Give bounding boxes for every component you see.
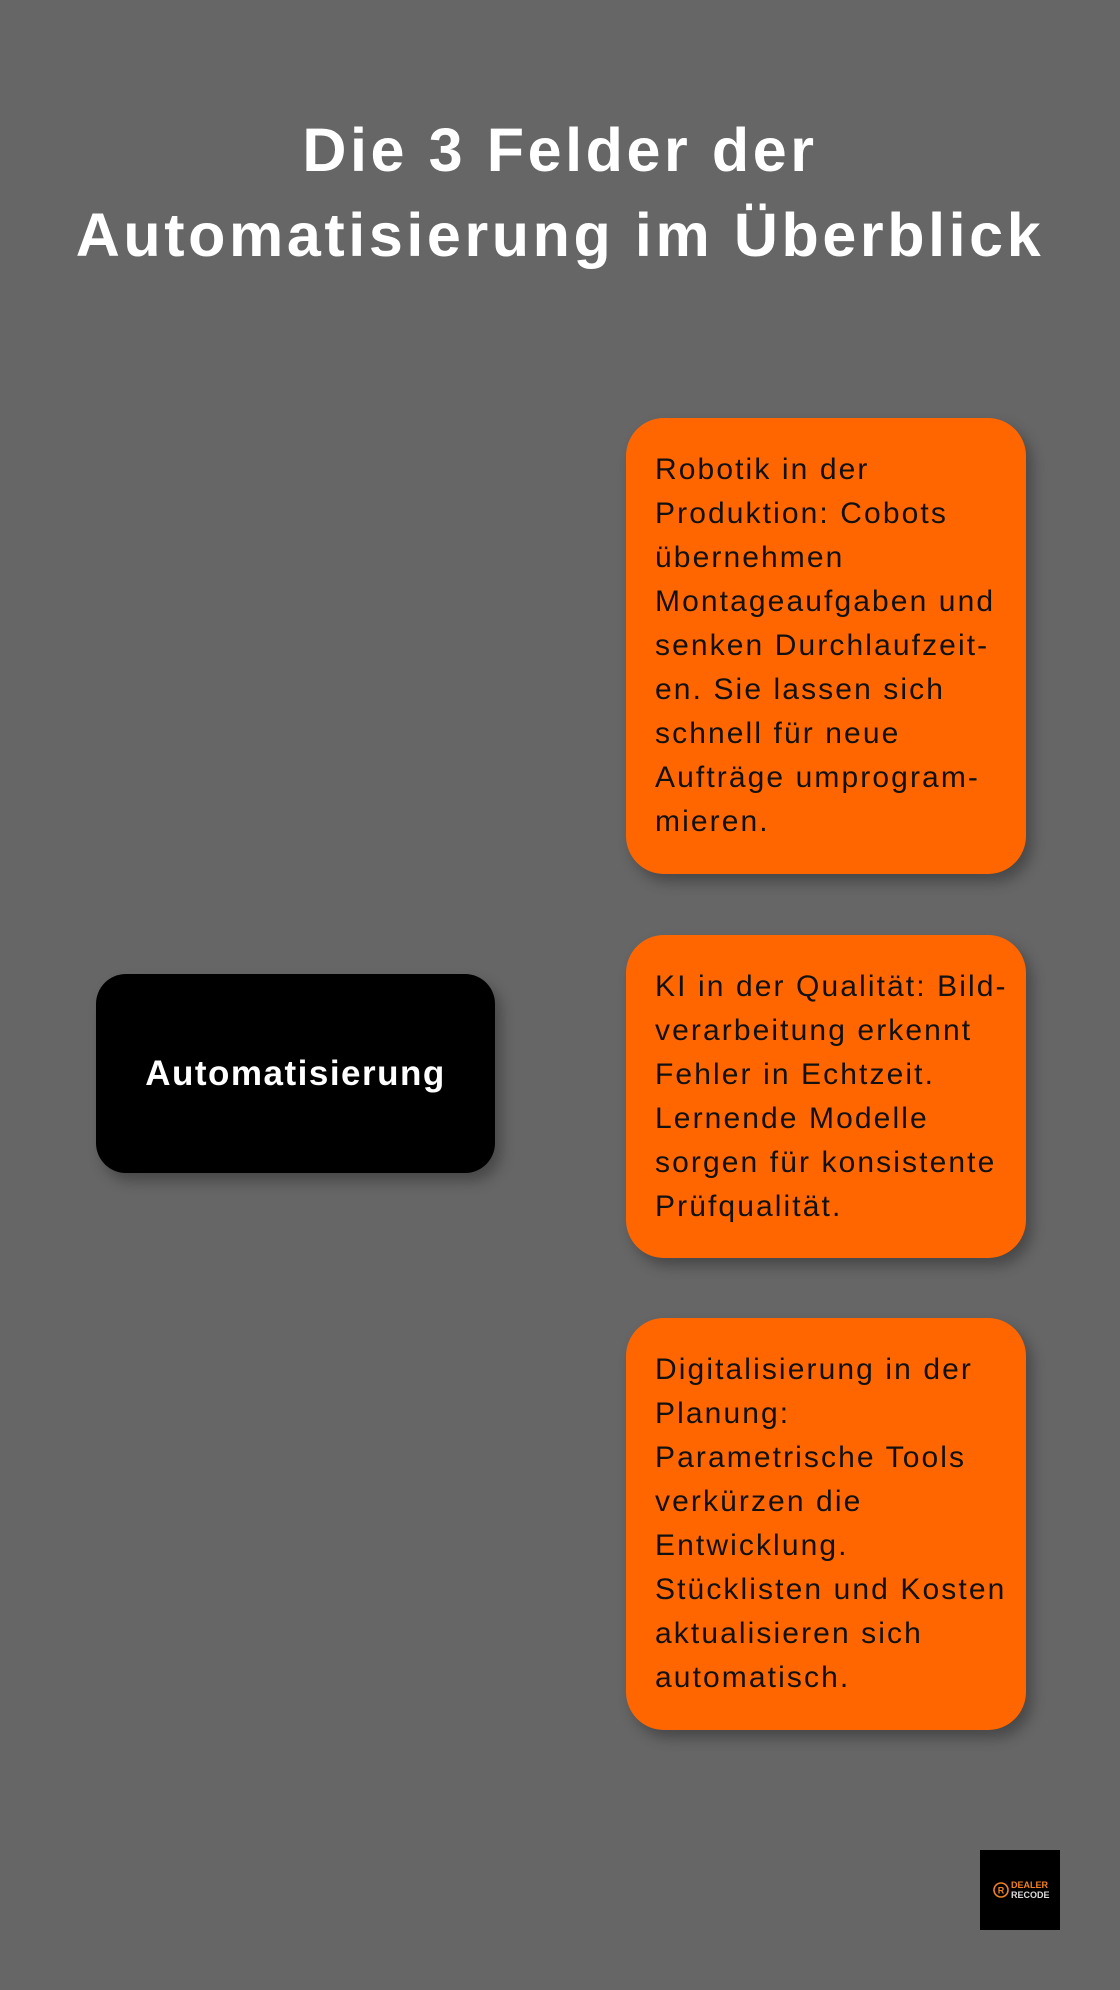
panel: Digitalisierung: Planung:	[655, 1397, 790, 1430]
panel: KI: sorgen für konsistente	[655, 1146, 996, 1179]
panel: Digitalisierung	[626, 1318, 1026, 1730]
panel: KI: verarbeitung erkennt	[655, 1014, 972, 1047]
panel: Robotik	[626, 418, 1026, 874]
panel: Digitalisierung: verkürzen die	[655, 1485, 862, 1518]
panel: Robotik: Produktion: Cobots	[655, 497, 948, 530]
title: Die 3 Felder der	[302, 116, 818, 184]
panel: Digitalisierung: Parametrische Tools	[655, 1441, 966, 1474]
central node: Automatisierung	[96, 974, 495, 1173]
panel: Digitalisierung: Entwicklung.	[655, 1529, 849, 1562]
panel: KI: Fehler in Echtzeit.	[655, 1058, 935, 1091]
logo: Dealer Recode: RECODE	[1011, 1890, 1050, 1900]
panel: Digitalisierung: automatisch.	[655, 1661, 850, 1694]
logo: Dealer Recode: R	[998, 1886, 1005, 1896]
logo: Dealer Recode	[980, 1850, 1060, 1930]
panel: Robotik: Robotik in der	[655, 453, 870, 486]
panel: Robotik: en. Sie lassen sich	[655, 673, 945, 706]
panel: Digitalisierung: Digitalisierung in der	[655, 1353, 973, 1386]
panel: Robotik: senken Durchlaufzeit-	[655, 629, 989, 662]
panel: Robotik: übernehmen	[655, 541, 844, 574]
title: Automatisierung im Überblick	[76, 201, 1044, 269]
panel: KI: Lernende Modelle	[655, 1102, 929, 1135]
logo: Dealer Recode: DEALER	[1011, 1880, 1049, 1890]
panel: KI	[626, 935, 1026, 1258]
panel: Digitalisierung: Stücklisten und Kosten	[655, 1573, 1006, 1606]
panel: Digitalisierung: aktualisieren sich	[655, 1617, 923, 1650]
panel: KI: KI in der Qualität: Bild-	[655, 970, 1008, 1003]
panel: Robotik: Aufträge umprogram-	[655, 761, 980, 794]
panel: Robotik: mieren.	[655, 805, 770, 838]
central node: Automatisierung: Automatisierung	[145, 1054, 446, 1092]
title	[76, 116, 1044, 269]
panel: Robotik: schnell für neue	[655, 717, 900, 750]
panel: Robotik: Montageaufgaben und	[655, 585, 995, 618]
panel: KI: Prüfqualität.	[655, 1190, 842, 1223]
